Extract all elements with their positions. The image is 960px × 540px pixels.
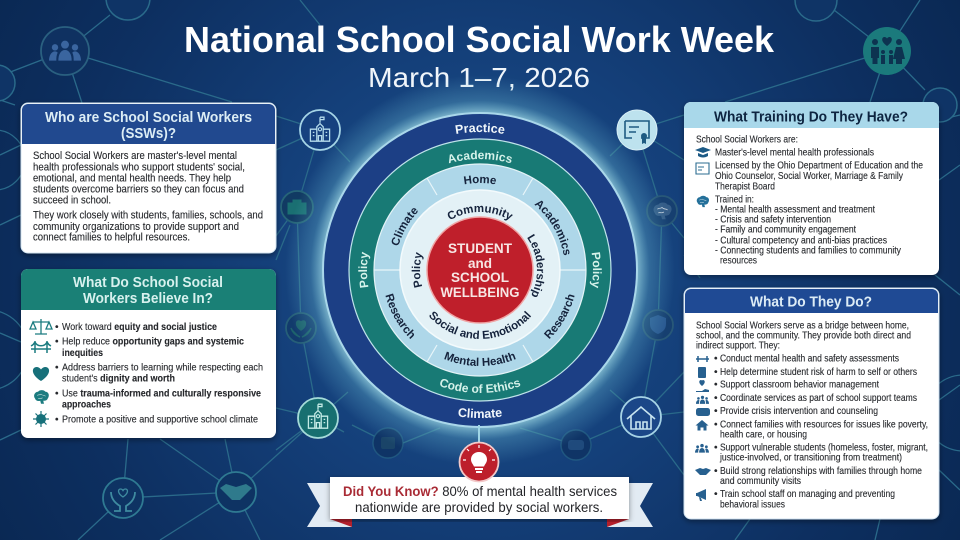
belief list: Work toward equity and social justice [62, 322, 217, 333]
icon: brain [697, 196, 709, 207]
inner ring labels: Social and Emotional [430, 310, 532, 339]
services list: • [714, 354, 718, 365]
services list: • [714, 393, 718, 404]
inner ring labels: Leadership [527, 234, 545, 297]
center circle: student and school wellbeing: and [468, 256, 492, 271]
teal ring labels: Policy [590, 252, 602, 288]
callout text: nationwide are provided by social workers. [355, 499, 603, 515]
heading: What Do School Social [73, 275, 223, 291]
title: National School Social Work Week [184, 19, 775, 60]
training text: Trained in: [715, 194, 754, 205]
belief list: Address barriers to learning while respecting each [62, 363, 263, 374]
services list [714, 354, 928, 510]
training text: Therapist Board [715, 181, 775, 192]
icon: brain [34, 390, 49, 404]
services list: Train school staff on managing and preventing [720, 489, 895, 500]
node: certificate [617, 110, 657, 150]
inner ring labels: Policy [412, 252, 424, 288]
training text: - Connecting students and families to community [715, 246, 902, 257]
body text: health professionals who support students' social, [33, 162, 245, 174]
intro text: indirect support. They: [696, 340, 780, 351]
light ring labels: Mental Health [444, 352, 516, 366]
concentric ring diagram [322, 112, 638, 428]
icons: services [695, 356, 711, 501]
panel: what do school social workers believe in [21, 269, 276, 438]
node: house [621, 397, 661, 437]
teal ring labels [358, 150, 602, 393]
center circle: student and school wellbeing [427, 217, 533, 323]
training text: - Crisis and safety intervention [715, 214, 831, 225]
node: people [41, 27, 89, 75]
callout text [343, 483, 617, 515]
belief list: approaches [62, 400, 111, 411]
services list: and community visits [720, 476, 801, 487]
training text: - Cultural competency and anti-bias practices [715, 235, 887, 246]
intro text [696, 320, 911, 351]
training text: Master's-level mental health professionals [715, 148, 874, 159]
services list: • [714, 367, 718, 378]
light ring labels: Climate [392, 208, 418, 246]
teal ring labels: Policy [358, 252, 370, 288]
light ring labels: Research [386, 294, 414, 339]
node: family [863, 27, 911, 75]
heading [73, 275, 223, 307]
belief list: • [55, 336, 59, 347]
icon: bridge [31, 341, 51, 353]
services list: • [714, 443, 718, 454]
body text: students overcome barriers so they can focus and [33, 184, 244, 196]
panel: what training do they have [684, 102, 939, 275]
body text: community organizations to provide support and [33, 221, 239, 233]
icon: scales [30, 319, 52, 334]
training text: School Social Workers are: [696, 135, 798, 146]
ring glow [285, 75, 675, 465]
panel: who are school social workers [21, 103, 276, 253]
inner ring labels [412, 206, 545, 339]
callout text: Did You Know? 80% of mental health services [343, 483, 617, 499]
belief list: student's dignity and worth [62, 374, 175, 385]
outer ring labels [455, 123, 504, 418]
icon: heart [33, 367, 49, 381]
services list: Provide crisis intervention and counseling [720, 406, 878, 417]
heading: What Training Do They Have? [714, 109, 908, 126]
services list: • [714, 380, 718, 391]
heading: What Do They Do? [750, 294, 872, 311]
panel: what do they do [684, 288, 939, 519]
belief list: inequities [62, 348, 103, 359]
heading: Who are School Social Workers [45, 110, 252, 126]
icon: sun [33, 411, 49, 427]
services list: Connect families with resources for issues like poverty, [720, 419, 928, 430]
intro text: School Social Workers serve as a bridge between home, [696, 320, 909, 331]
center circle: student and school wellbeing: STUDENT [448, 241, 513, 256]
node: heart hands [286, 313, 316, 343]
belief list: Help reduce opportunity gaps and systemic [62, 336, 244, 347]
belief list: • [55, 415, 59, 426]
services list: Coordinate services as part of school support teams [720, 393, 917, 404]
training text: Licensed by the Ohio Department of Education and the [715, 161, 923, 172]
light ring labels: Academics [534, 200, 570, 256]
training text: - Family and community engagement [715, 225, 856, 236]
body text: They work closely with students, families, schools, and [33, 210, 263, 222]
node: briefcase [281, 191, 313, 223]
connector to light bulb [478, 425, 480, 443]
teal ring labels: Academics [448, 150, 512, 164]
node: shield [643, 310, 673, 340]
services list: Build strong relationships with families through home [720, 466, 922, 477]
node: caring hands [103, 478, 143, 518]
icon: light bulb [460, 442, 498, 482]
services list: • [714, 419, 718, 430]
node: school outline [300, 110, 340, 150]
node: brain [647, 196, 677, 226]
services list: behavioral issues [720, 499, 785, 510]
body text: connect families to helpful resources. [33, 232, 190, 244]
light ring labels: Home [464, 176, 496, 184]
belief list: • [55, 389, 59, 400]
services list: • [714, 466, 718, 477]
center circle: student and school wellbeing: SCHOOL [451, 270, 509, 285]
outer ring labels: Practice [455, 123, 504, 134]
training text: resources [720, 256, 757, 267]
icon: license card [696, 163, 709, 174]
belief list: • [55, 322, 59, 333]
services list: Help determine student risk of harm to self or others [720, 367, 917, 378]
services list: Support classroom behavior management [720, 380, 879, 391]
heading: Workers Believe In? [83, 291, 213, 307]
heading [45, 110, 252, 142]
belief list: Promote a positive and supportive school climate [62, 415, 258, 426]
body text: succeed in school. [33, 194, 111, 206]
node: handshake [216, 472, 256, 512]
inner ring labels: Community [448, 206, 513, 220]
services list: Conduct mental health and safety assessments [720, 354, 899, 365]
callout: did you know ribbon [307, 442, 653, 527]
belief list: Use trauma-informed and culturally responsive [62, 389, 261, 400]
center circle: student and school wellbeing: WELLBEING [440, 285, 520, 300]
body text: emotional, and mental health needs. They help [33, 173, 231, 185]
belief list [55, 322, 263, 426]
subtitle: March 1–7, 2026 [368, 62, 590, 93]
training text: - Mental health assessment and treatment [715, 204, 875, 215]
node: school teal [298, 398, 338, 438]
services list: • [714, 406, 718, 417]
heading: (SSWs)? [121, 126, 176, 142]
teal ring labels: Code of Ethics [440, 379, 520, 393]
body text [33, 150, 263, 244]
light ring labels [386, 176, 574, 366]
training text [696, 135, 923, 267]
services list: • [714, 489, 718, 500]
icon: graduation cap [695, 147, 711, 158]
outer ring labels: Climate [458, 408, 502, 418]
belief list: • [55, 363, 59, 374]
services list: justice-involved, or transitioning from treatment) [719, 453, 902, 464]
body text: School Social Workers are master's-level mental [33, 150, 237, 162]
services list: health care, or housing [720, 430, 807, 441]
training text: Ohio Counselor, Social Worker, Marriage & Family [715, 171, 904, 182]
intro text: school, and the community. They provide both direct and [696, 330, 911, 341]
light ring labels: Research [544, 294, 574, 339]
